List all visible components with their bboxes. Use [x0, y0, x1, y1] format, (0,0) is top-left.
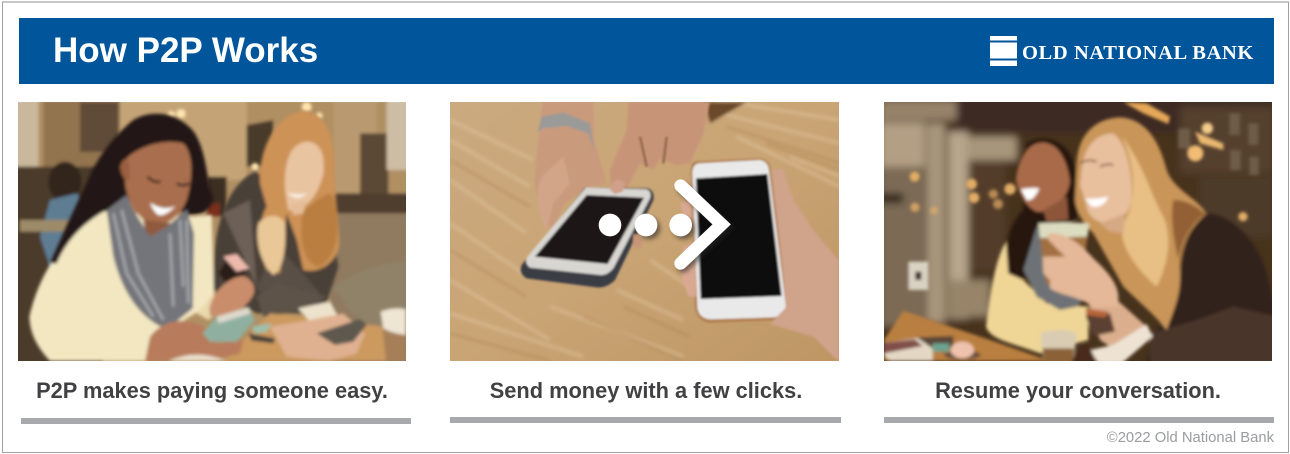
woman 1 sweater	[29, 212, 214, 361]
header banner	[19, 18, 1274, 84]
title: How P2P Works	[53, 31, 318, 70]
woman 1 face	[125, 142, 191, 225]
coffee cup in hand	[1038, 223, 1089, 285]
phone left and hand	[145, 321, 243, 361]
divider bar: step 1	[21, 418, 411, 424]
logo: Old National Bank	[990, 36, 1254, 66]
icon shadow	[638, 189, 726, 267]
caption: step 3: Resume your conversation.	[935, 378, 1221, 403]
phone right and hand	[270, 313, 365, 361]
front woman hand	[1043, 233, 1118, 307]
caption: step 2: Send money with a few clicks.	[490, 378, 802, 403]
hand holding cupcake	[209, 276, 254, 316]
photo: phones on wood table with transfer icon	[450, 102, 839, 361]
logo wordmark: OLD NATIONAL BANK	[1022, 42, 1254, 64]
front woman hair	[1075, 117, 1206, 330]
photo: two women looking at phones	[18, 102, 406, 361]
cupcake	[218, 260, 245, 287]
cup	[381, 308, 406, 361]
woman 1 hair	[50, 114, 213, 263]
front woman face	[1080, 133, 1132, 224]
left phone	[521, 187, 654, 287]
ceiling lights	[1123, 102, 1170, 124]
front woman dark sweater	[1147, 213, 1277, 363]
caption: step 1: P2P makes paying someone easy.	[36, 378, 388, 403]
back woman face	[1016, 143, 1070, 212]
wood grain	[450, 100, 840, 357]
woman 2	[213, 172, 338, 313]
bag	[333, 261, 406, 327]
table	[223, 313, 387, 361]
right hand	[770, 168, 839, 361]
cup on table	[1041, 330, 1077, 363]
divider bar: step 3	[884, 417, 1274, 423]
woman 1 scarf	[107, 195, 194, 329]
cake	[944, 350, 981, 360]
window squares	[1178, 113, 1259, 175]
bracelet	[1085, 313, 1115, 336]
logo mark	[990, 36, 1017, 66]
right phone	[691, 158, 788, 323]
bokeh lights	[910, 172, 1248, 221]
copyright: ©2022 Old National Bank	[1107, 430, 1274, 446]
pointing hand	[610, 102, 710, 192]
book	[884, 337, 933, 361]
hand with wristband	[535, 102, 607, 228]
lights	[168, 102, 323, 170]
icon: transfer dots and chevron	[599, 186, 722, 263]
front woman arm	[1088, 297, 1147, 353]
back woman hair	[1003, 139, 1080, 280]
table	[884, 311, 1050, 361]
back woman scarf	[1023, 227, 1088, 310]
divider bar: step 2	[450, 417, 841, 423]
back woman sweater	[986, 242, 1088, 353]
photo: two women laughing with coffee	[884, 102, 1272, 361]
